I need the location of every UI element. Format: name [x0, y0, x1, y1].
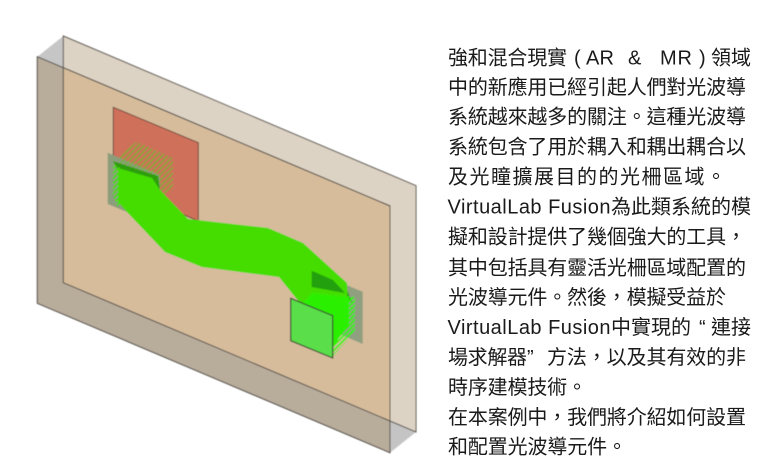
line 11: ”: [527, 347, 534, 369]
line 1: &: [628, 48, 642, 70]
out-coupling bright core: [300, 294, 349, 345]
line 13: 在本案例中，我們將介紹如何設置: [448, 406, 746, 429]
line 6: VirtualLab Fusion: [448, 196, 610, 218]
description text: [448, 46, 751, 458]
line 7: 擬和設計提供了幾個強大的工具，: [448, 226, 746, 248]
line 4: 系統包含了用於耦入和耦出耦合以: [448, 136, 746, 158]
line 1: AR: [586, 48, 614, 70]
in-coupling grating: [108, 142, 173, 212]
out-coupling grating back: [312, 271, 363, 344]
front out-coupling square: [291, 298, 333, 358]
front plate: [37, 57, 390, 453]
line 1: (: [574, 48, 581, 70]
line 11: 方法，以及其有效的非: [547, 346, 746, 369]
line 2: 中的新應用已經引起人們對光波導: [448, 75, 746, 99]
line 1: ): [699, 48, 706, 70]
line 9: 光波導元件。然後，模擬受益於: [448, 286, 726, 309]
line 1: 領域: [711, 46, 751, 70]
green light path: [118, 168, 348, 345]
waveguide illustration: [37, 36, 416, 453]
line 14: 和配置光波導元件。: [448, 436, 627, 458]
line 1: 強和混合現實: [448, 46, 567, 70]
corner side faces: [37, 36, 416, 453]
line 11: 場求解器: [448, 346, 527, 369]
line 8: 其中包括具有靈活光柵區域配置的: [448, 256, 746, 280]
out-coupling dark band: [312, 271, 345, 293]
line 3: 系統越來越多的關注。這種光波導: [448, 106, 746, 128]
line 10: VirtualLab Fusion: [448, 317, 610, 339]
line 10: “: [699, 317, 706, 339]
line 12: 時序建模技術。: [448, 376, 587, 399]
line 10: 連接: [711, 316, 751, 339]
back plate: [63, 36, 416, 432]
line 10: 中實現的: [611, 316, 691, 339]
line 6: 為此類系統的模: [611, 196, 751, 218]
plate overlap: [63, 68, 390, 421]
line 5: 及光瞳擴展目的的光柵區域。: [448, 166, 726, 188]
line 1: MR: [660, 48, 692, 70]
out-coupling hatch: [292, 292, 355, 356]
red in-coupling region: [113, 107, 198, 221]
in-coupling hatch edge: [113, 163, 120, 208]
